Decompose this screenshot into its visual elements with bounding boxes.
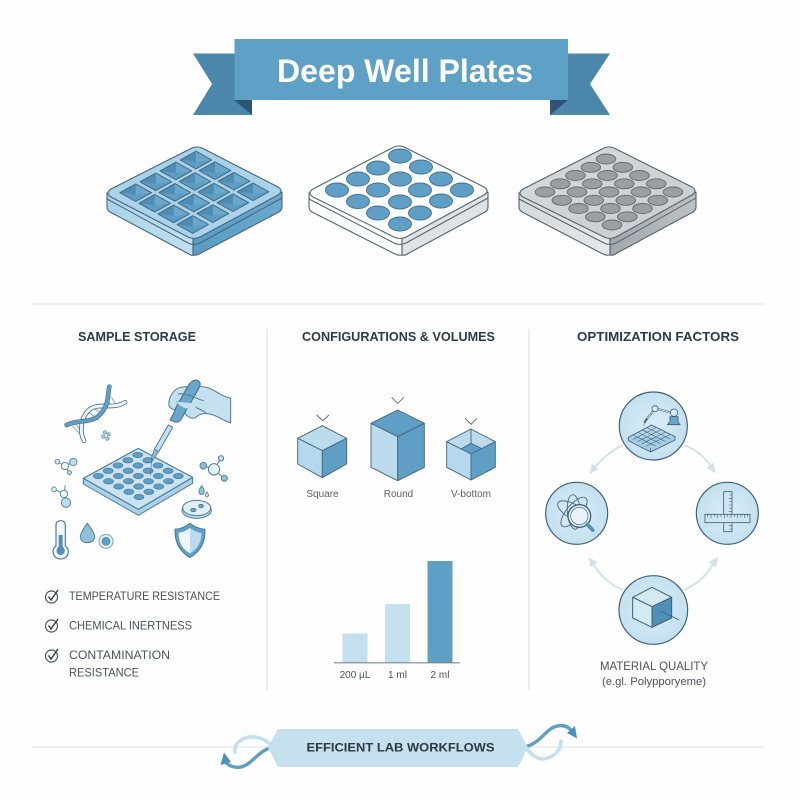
- banner left fold: [234, 100, 252, 115]
- cycle diagram: [546, 392, 758, 644]
- node: automation: [619, 392, 687, 460]
- heading: configurations and volumes: CONFIGURATIONS & VOLUMES: [302, 329, 495, 344]
- illustration: sample storage: [52, 380, 231, 559]
- caption: material quality: MATERIAL QUALITY: [600, 659, 708, 673]
- shape: square: [298, 415, 347, 478]
- node: dimensions: [696, 482, 758, 544]
- icon: ring dot: [99, 534, 113, 548]
- footer: efficient lab workflows: [220, 726, 577, 767]
- icon: water drop: [80, 523, 95, 543]
- caption: material quality: (e.gl. Polypporyeme): [602, 676, 706, 688]
- checklist: [46, 589, 220, 680]
- cycle arrows: [588, 445, 718, 590]
- heading: optimization factors: OPTIMIZATION FACTORS: [577, 329, 739, 344]
- banner right fold: [550, 100, 568, 115]
- item: chemical inertness: CHEMICAL INERTNESS: [69, 618, 192, 632]
- node: material quality: [619, 576, 688, 644]
- shape: V-bottom: [447, 418, 495, 480]
- icon: molecule lower left: [52, 485, 71, 507]
- banner left tail: [193, 54, 252, 115]
- icon: well plate: [83, 448, 193, 515]
- banner ribbon: [234, 39, 568, 100]
- title banner: [193, 39, 610, 115]
- bar chart: 200 µL: [340, 670, 371, 681]
- bar chart: [334, 561, 460, 681]
- labels: well shapes: [306, 489, 491, 500]
- bar chart: 2 ml: [431, 670, 449, 681]
- footer left arrows: [220, 737, 282, 767]
- shape: round: [371, 397, 424, 481]
- labels: well shapes: V-bottom: [451, 489, 491, 500]
- labels: well shapes: Square: [306, 489, 339, 500]
- title: Deep Well Plates: [277, 53, 533, 89]
- node: chemical analysis: [546, 482, 608, 544]
- item: temperature resistance: TEMPERATURE RESISTANCE: [69, 589, 220, 603]
- plate: gray with round wells: [519, 147, 696, 255]
- footer ribbon: [268, 729, 528, 767]
- icon: DNA helix: [67, 387, 125, 441]
- labels: well shapes: Round: [384, 489, 413, 500]
- icon: small droplets cluster: [102, 431, 110, 440]
- icon: molecule upper left: [55, 458, 77, 475]
- item: contamination resistance: CONTAMINATION: [69, 648, 170, 662]
- plate: white with round blue wells: [309, 146, 488, 255]
- icon: pipette and hand: [150, 380, 231, 475]
- icon: droplets right: [199, 486, 208, 497]
- panel: configurations and volumes: [298, 329, 495, 681]
- caption: material quality: [600, 659, 708, 688]
- plate: blue square wells: [107, 147, 282, 255]
- icon: molecule right: [200, 456, 227, 481]
- panel: optimization factors: [546, 329, 758, 688]
- item: contamination resistance: [46, 648, 170, 680]
- banner right tail: [550, 54, 610, 115]
- panel: sample storage: [46, 329, 231, 680]
- well shapes: [298, 397, 495, 481]
- item: contamination resistance: RESISTANCE: [69, 666, 139, 680]
- icon: petri dish: [182, 500, 211, 518]
- footer text: EFFICIENT LAB WORKFLOWS: [306, 740, 495, 754]
- icon: thermometer: [53, 521, 68, 559]
- heading: sample storage: SAMPLE STORAGE: [78, 329, 196, 344]
- icon: shield: [175, 523, 205, 558]
- bar chart: 1 ml: [388, 670, 407, 681]
- footer right arrows: [515, 726, 577, 759]
